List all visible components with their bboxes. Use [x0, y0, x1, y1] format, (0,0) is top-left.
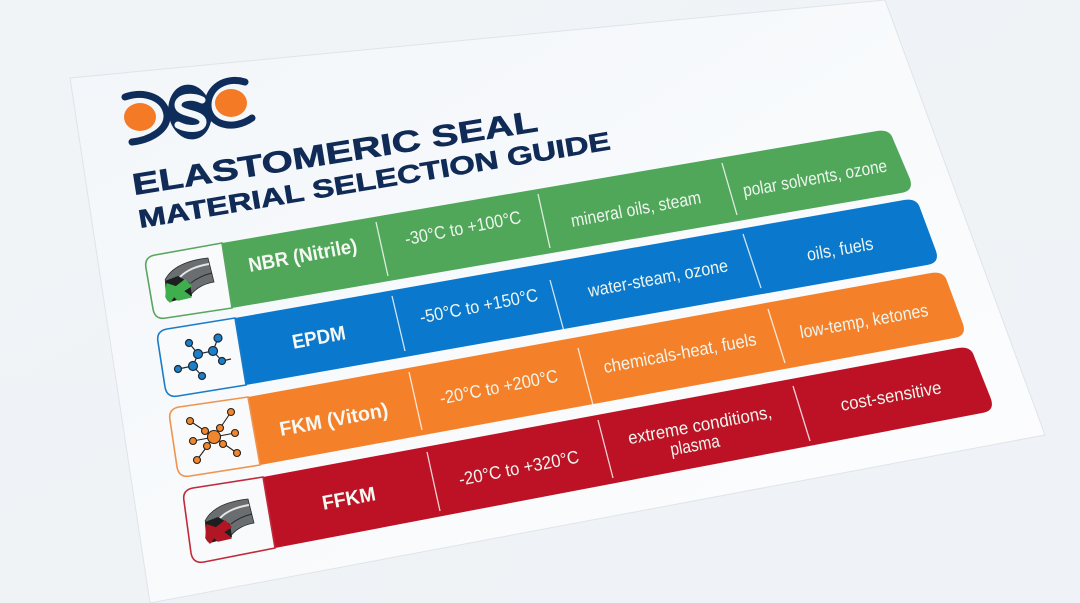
logo: left orange circle	[124, 103, 156, 131]
icon: FKM molecule	[186, 408, 240, 464]
EPDM temperature: -50°C to +150°C	[418, 285, 540, 327]
FFKM good for: extreme conditions,	[626, 402, 774, 448]
FKM colour band	[248, 273, 964, 465]
NBR colour band	[222, 131, 911, 308]
icon: NBR seal	[165, 258, 214, 302]
logo: navy arcs	[125, 80, 252, 142]
EPDM good for: water-steam, ozone	[585, 255, 730, 301]
EPDM name: EPDM	[290, 322, 347, 354]
FKM name: FKM (Viton)	[278, 399, 390, 441]
logo: right orange circle	[215, 89, 247, 117]
NBR name: NBR (Nitrile)	[247, 235, 359, 277]
row: EPDM	[158, 200, 937, 396]
title	[130, 105, 612, 234]
icon: FFKM seal	[205, 499, 254, 543]
EPDM icon box	[158, 318, 246, 396]
logo	[124, 80, 252, 142]
FFKM name: FFKM	[320, 483, 377, 515]
EPDM colour band	[235, 200, 937, 385]
FFKM avoid: cost-sensitive	[839, 377, 943, 415]
FKM avoid: low-temp, ketones	[798, 300, 930, 342]
FFKM icon box	[184, 477, 275, 562]
FFKM good for: plasma	[669, 431, 722, 459]
row: FKM	[170, 273, 964, 476]
FFKM temperature: -20°C to +320°C	[457, 447, 581, 490]
title line 1: ELASTOMERIC SEAL	[130, 105, 540, 202]
title line 2: MATERIAL SELECTION GUIDE	[136, 127, 612, 234]
NBR icon box	[146, 243, 232, 318]
NBR good for: mineral oils, steam	[569, 187, 703, 231]
EPDM avoid: oils, fuels	[805, 233, 875, 265]
FKM icon box	[170, 397, 260, 476]
row: FFKM	[184, 348, 992, 562]
NBR avoid: polar solvents, ozone	[741, 156, 889, 201]
icon: EPDM molecule	[174, 334, 231, 380]
FKM good for: chemicals-heat, fuels	[602, 329, 758, 377]
NBR temperature: -30°C to +100°C	[403, 207, 523, 249]
row: NBR	[146, 131, 911, 318]
FKM temperature: -20°C to +200°C	[438, 366, 560, 408]
logo: white S	[178, 97, 203, 128]
FFKM colour band	[263, 348, 992, 548]
